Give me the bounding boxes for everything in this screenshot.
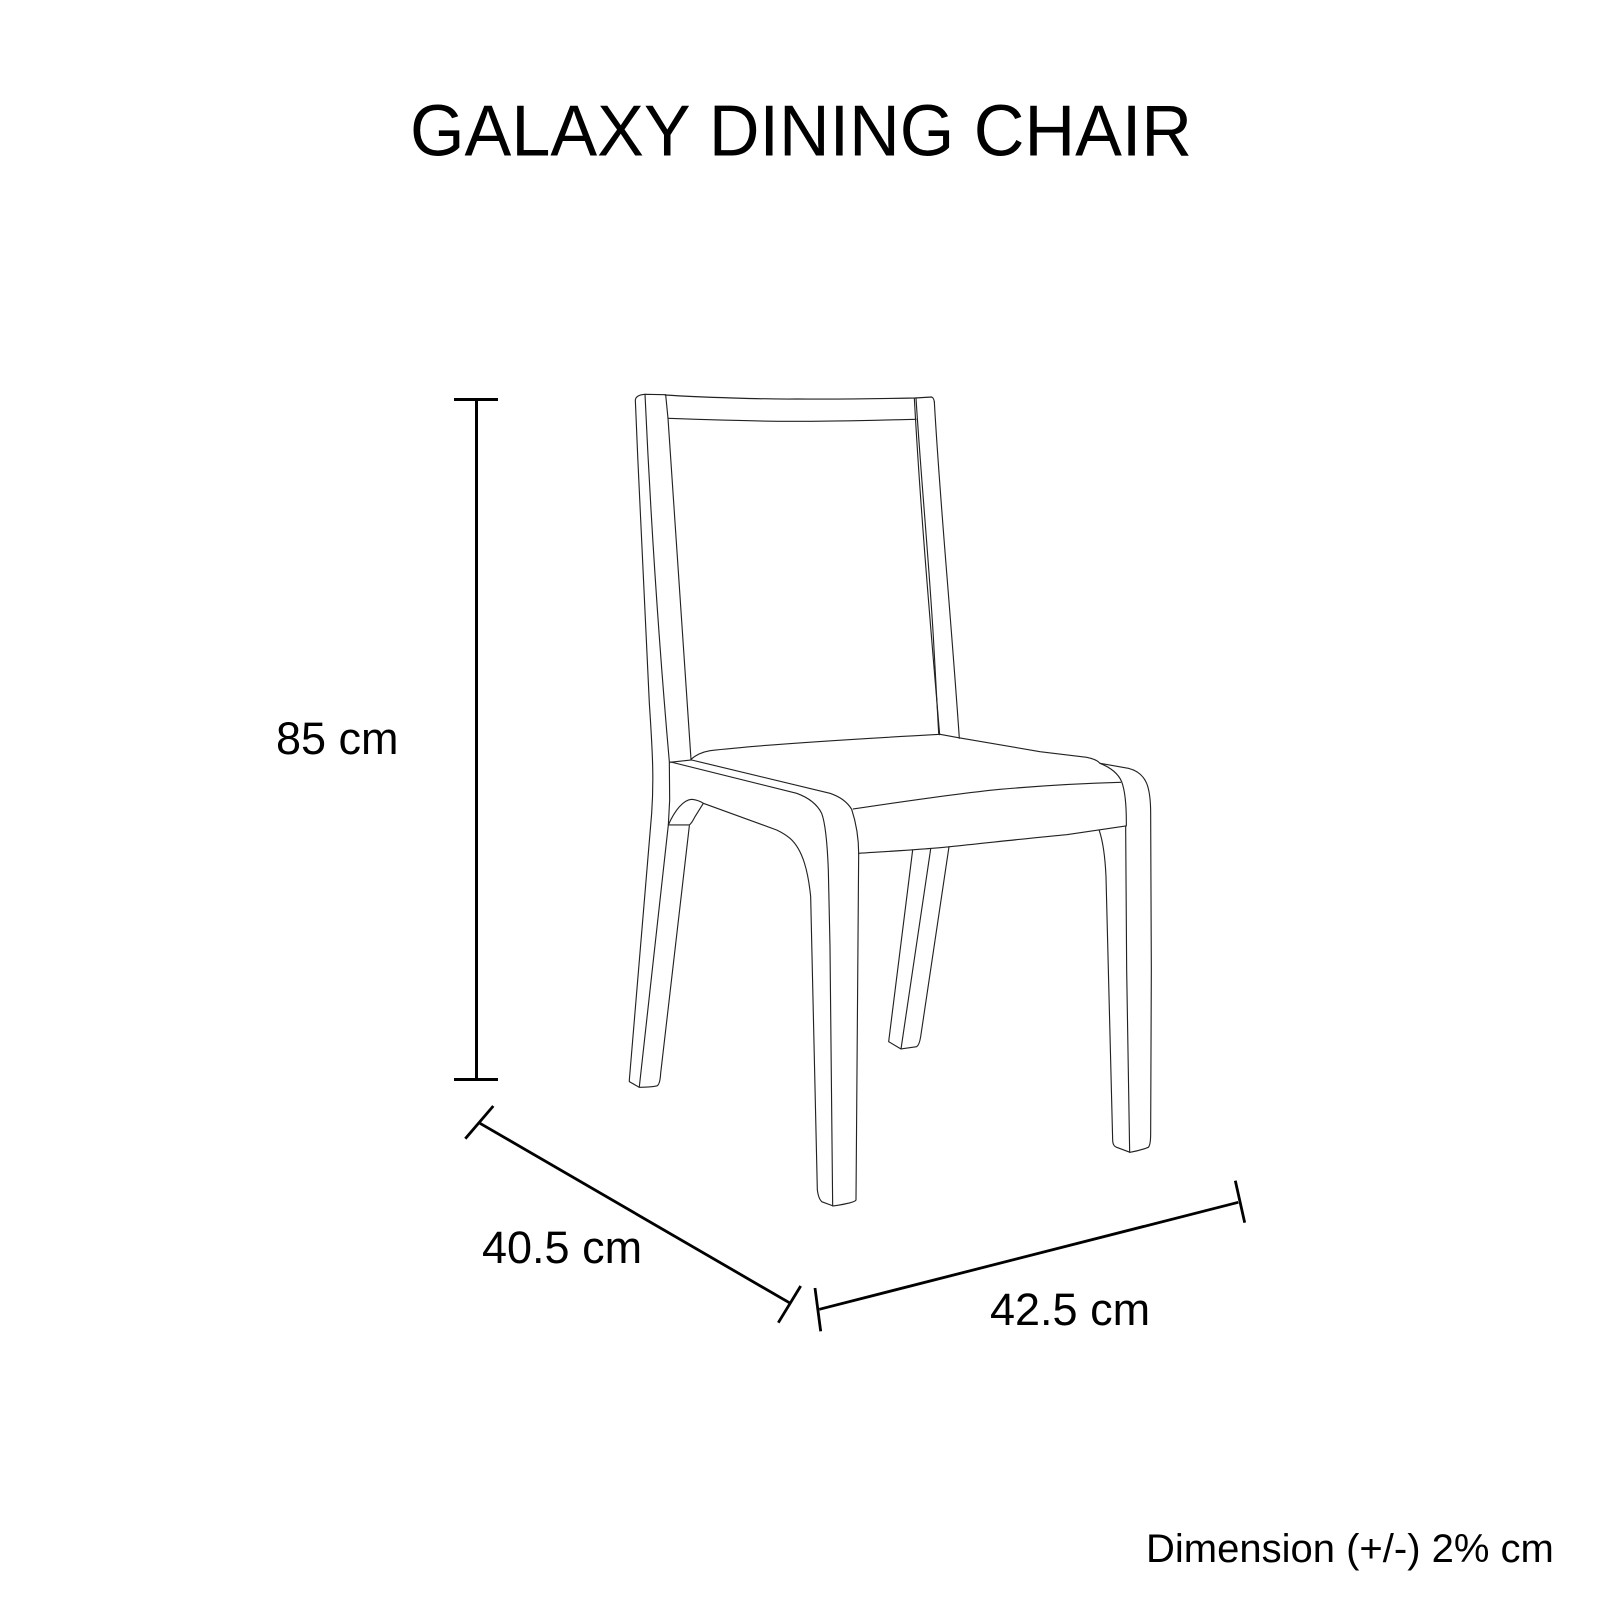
rear right leg (889, 847, 949, 1049)
depth dimension arrow (465, 1106, 801, 1323)
width dimension arrow (815, 1181, 1245, 1331)
title: GALAXY DINING CHAIR (410, 92, 1192, 172)
chair line drawing (629, 394, 1151, 1206)
top back rail (665, 395, 934, 421)
height dimension arrow (454, 400, 498, 1080)
back left post and rear leg (629, 394, 691, 1087)
width label: 42.5 cm (990, 1284, 1150, 1335)
back right post (914, 398, 959, 738)
front right leg (1099, 763, 1151, 1152)
seat cushion (691, 734, 1126, 853)
height label: 85 cm (276, 713, 399, 764)
depth label: 40.5 cm (482, 1222, 642, 1273)
tolerance note: Dimension (+/-) 2% cm (1146, 1527, 1554, 1571)
side seat rail and front left leg (668, 760, 859, 1206)
